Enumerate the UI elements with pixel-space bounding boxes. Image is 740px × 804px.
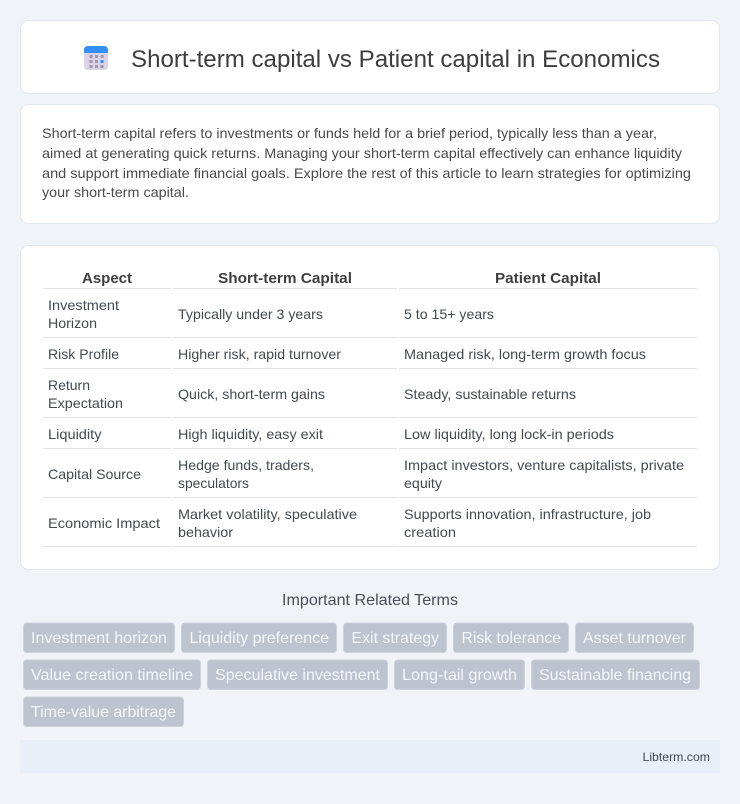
tag: liquidity preference: Liquidity preference [190, 630, 329, 647]
tag: speculative investment: Speculative investment [215, 667, 381, 684]
table row: economic impact: Economic Impact [48, 515, 160, 531]
tag: asset turnover [576, 623, 694, 652]
table row: investment horizon [43, 297, 697, 338]
table row: investment horizon: Investment [48, 297, 119, 313]
tag: investment horizon: Investment horizon [31, 630, 167, 647]
table row: liquidity: Low liquidity, long lock-in periods [404, 426, 614, 442]
tag: value creation timeline [24, 660, 200, 690]
table row: capital source: equity [404, 475, 442, 491]
tag: risk tolerance [454, 623, 568, 652]
title: Short-term capital vs Patient capital in Economics [131, 46, 660, 73]
table row: investment horizon: Horizon [48, 315, 97, 331]
icon: calendar [84, 46, 108, 70]
table header row: Aspect [82, 270, 132, 287]
heading: important related terms: Important Related Terms [282, 592, 458, 609]
table row: risk profile: Managed risk, long-term growth focus [404, 346, 646, 362]
text block: introduction paragraph: your short-term capital. [42, 184, 189, 200]
table row: risk profile: Higher risk, rapid turnover [178, 346, 341, 362]
panel: comparison table [20, 246, 720, 570]
table row: return expectation: Quick, short-term gains [178, 386, 325, 402]
table row: return expectation [43, 377, 697, 418]
table row: economic impact: creation [404, 524, 456, 540]
table header row [43, 270, 697, 288]
table row: liquidity: High liquidity, easy exit [178, 426, 323, 442]
table row: economic impact [43, 506, 697, 546]
panel: header card [20, 20, 720, 94]
table row: investment horizon: Typically under 3 years [178, 306, 323, 322]
tag: sustainable financing: Sustainable financing [539, 667, 691, 684]
footer source label: Libterm.com [642, 750, 710, 764]
tag: investment horizon [24, 623, 174, 652]
tag: time-value arbitrage [24, 697, 184, 726]
table row: liquidity: Liquidity [48, 426, 102, 442]
table row: investment horizon: 5 to 15+ years [404, 306, 494, 322]
tag: long-tail growth [394, 660, 524, 690]
table row: economic impact: Supports innovation, infrastructure, job [404, 506, 651, 522]
tag: asset turnover: Asset turnover [583, 630, 687, 647]
table row: risk profile: Risk Profile [48, 346, 119, 362]
table row: capital source [43, 457, 697, 498]
text block: introduction paragraph: aimed at generating quick returns. Managing your short-term capital effectively can enhance liquidity [42, 145, 682, 161]
table row: capital source: Impact investors, venture capitalists, private [404, 457, 684, 473]
tag: exit strategy [344, 623, 446, 652]
tag: time-value arbitrage: Time-value arbitrage [31, 704, 176, 721]
table row: capital source: speculators [178, 475, 249, 491]
table header row: Short-term Capital [218, 270, 352, 287]
text block: introduction paragraph: Short-term capital refers to investments or funds held for a brief period, typically less than a year, [42, 125, 657, 141]
table row: return expectation: Steady, sustainable returns [404, 386, 576, 402]
tag: sustainable financing [532, 660, 700, 690]
table header row: Patient Capital [495, 270, 601, 287]
panel: introduction [20, 104, 720, 224]
footer [20, 740, 720, 774]
panel: related term tags [24, 623, 700, 726]
table row: economic impact: Market volatility, speculative [178, 506, 357, 522]
table row: capital source: Capital Source [48, 466, 141, 482]
table row: return expectation: Return [48, 377, 90, 393]
tag: speculative investment [208, 660, 388, 690]
text block: introduction paragraph [42, 125, 691, 200]
tag: risk tolerance: Risk tolerance [462, 630, 561, 647]
table row: liquidity [43, 426, 697, 448]
table row: return expectation: Expectation [48, 395, 123, 411]
table row: risk profile [43, 346, 697, 368]
tag: liquidity preference [182, 623, 336, 652]
tag: value creation timeline: Value creation timeline [31, 667, 193, 684]
table row: capital source: Hedge funds, traders, [178, 457, 314, 473]
table row: economic impact: behavior [178, 524, 233, 540]
tag: long-tail growth: Long-tail growth [402, 667, 517, 684]
text block: introduction paragraph: and support immediate financial goals. Explore the rest of this article to learn strategies for optimizing [42, 165, 691, 181]
tag: exit strategy: Exit strategy [352, 630, 439, 647]
